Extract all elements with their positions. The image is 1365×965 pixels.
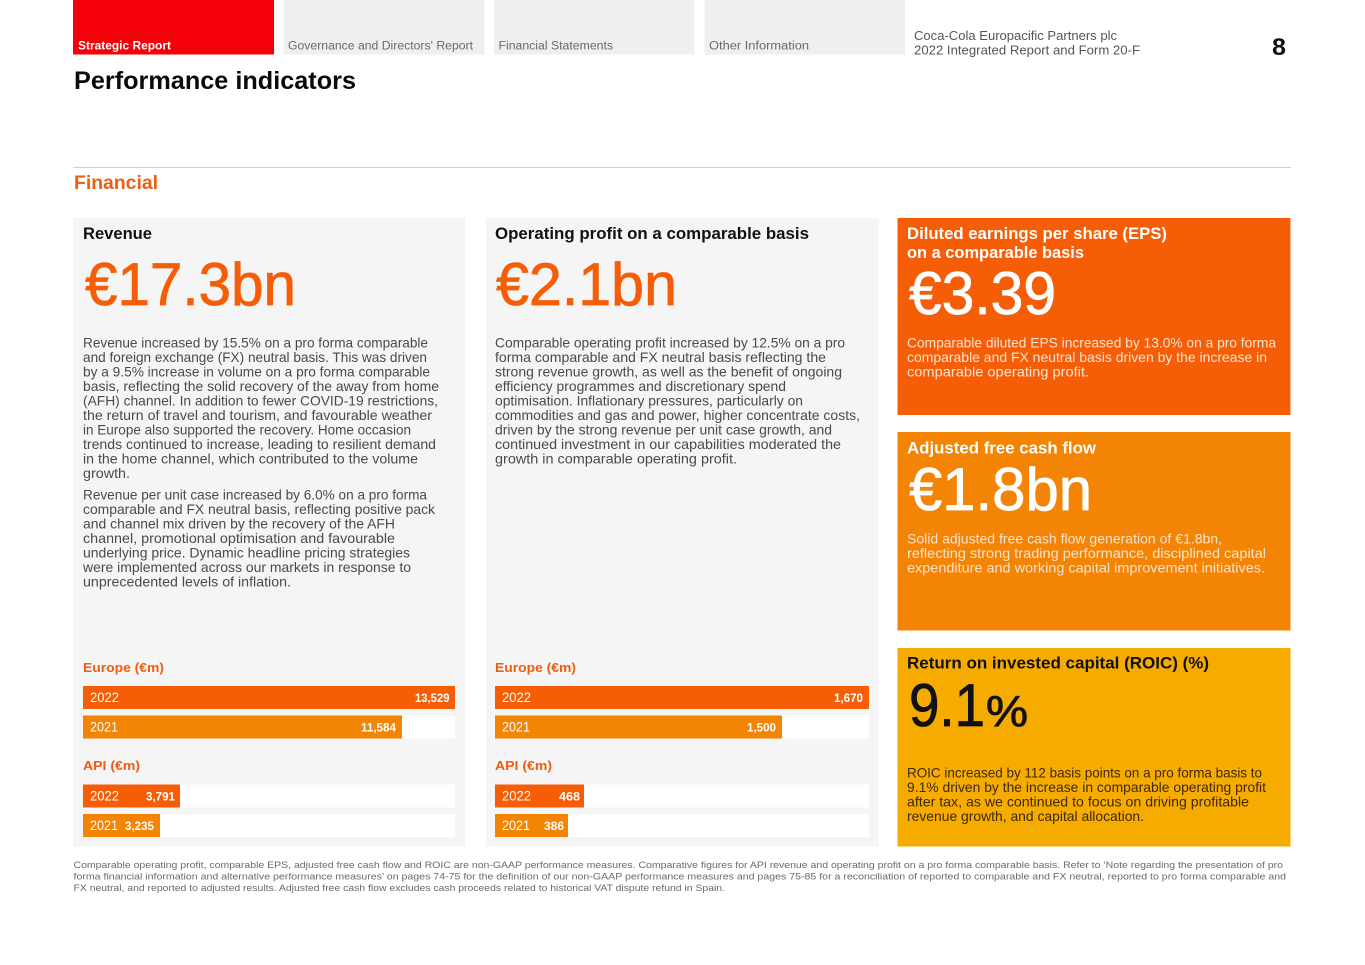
page number: 8 (1272, 34, 1286, 61)
text: revenue commentary: Revenue per unit case increased by 6.0% on a pro forma (83, 488, 427, 502)
tab: Financial Statements: Financial Statements (498, 40, 613, 52)
bar chart: Europe revenue: 13,529 (415, 693, 450, 705)
text: operating profit commentary: optimisation. Inflationary pressures, particularly on (495, 394, 803, 408)
text: revenue commentary: unprecedented levels of inflation. (83, 574, 291, 590)
text: operating profit commentary (495, 336, 860, 466)
heading: Operating profit: Operating profit on a comparable basis (495, 225, 809, 243)
text: EPS commentary: Comparable diluted EPS increased by 13.0% on a pro forma (907, 336, 1276, 350)
text: revenue commentary: trends continued to increase, leading to resilient demand (83, 437, 436, 452)
text: revenue commentary: (AFH) channel. In addition to fewer COVID-19 restrictions, (83, 394, 438, 408)
text: adjusted free cash flow commentary: Solid adjusted free cash flow generation of €1.8bn, (907, 532, 1222, 546)
value: operating profit: €2.1bn (496, 251, 677, 318)
footnote: forma financial information and alternative performance measures’ on pages 74-75 for the definition of our non-GAAP performance measures and pages 75-85 for a reconciliation of reported to comparable and FX neutral, reported to pro forma comparable and (74, 870, 1286, 882)
bar chart: Europe revenue (83, 686, 455, 738)
bar chart: API revenue: 2021 (90, 818, 118, 833)
bar chart: Europe operating profit: 1,670 (834, 693, 863, 705)
bar chart: API revenue: 2022 (90, 788, 119, 804)
text: ROIC commentary: after tax, as we continued to focus on driving profitable (907, 794, 1249, 810)
bar chart: Europe operating profit: 1,500 (747, 722, 776, 734)
text: revenue commentary: were implemented across our markets in response to (82, 560, 411, 575)
text: operating profit commentary: strong revenue growth, as well as the benefit of ongoing (495, 364, 842, 380)
text: operating profit commentary: driven by the strong revenue per unit case growth, and (495, 422, 832, 438)
heading: diluted EPS (907, 225, 1167, 262)
tab: Strategic Report (73, 0, 274, 54)
text: revenue commentary: in Europe also supported the recovery. Home occasion (83, 422, 411, 438)
heading: diluted EPS: on a comparable basis (907, 244, 1084, 262)
report name: Coca-Cola Europacific Partners plc (914, 29, 1117, 43)
section heading: Financial: Financial (74, 173, 158, 194)
panel: ROIC (898, 648, 1290, 846)
text: ROIC commentary: 9.1% driven by the increase in comparable operating profit (907, 780, 1266, 795)
bar chart: API revenue: 3,791 (146, 792, 176, 804)
label: API revenue: API (€m) (83, 758, 140, 773)
bar chart: Europe operating profit (495, 686, 869, 738)
text: revenue commentary: comparable and FX neutral basis, reflecting positive pack (83, 502, 435, 517)
text: EPS commentary: comparable and FX neutral basis driven by the increase in (907, 350, 1267, 365)
text: operating profit commentary: growth in comparable operating profit. (495, 452, 737, 466)
text: revenue commentary: growth. (83, 466, 130, 481)
tab: Financial Statements (494, 0, 694, 54)
text: revenue commentary: underlying price. Dynamic headline pricing strategies (83, 546, 410, 560)
bar chart: Europe operating profit: 2022 (502, 690, 531, 705)
tab: Other Information: Other Information (709, 40, 809, 52)
bar chart: API operating profit: 2021 (502, 818, 530, 833)
footnote: Comparable operating profit, comparable EPS, adjusted free cash flow and ROIC are non-GAAP performance measures. Comparative figures for API revenue and operating profit on a pro forma comparable basis. Refer to ‘Note regarding the presentation of pro (74, 859, 1283, 870)
value: revenue: €17.3bn (85, 251, 296, 318)
text: revenue commentary: by a 9.5% increase in volume on a pro forma comparable (83, 364, 430, 380)
bar chart: Europe revenue: 2022 (90, 690, 119, 705)
value: EPS: €3.39 (909, 260, 1056, 327)
bar chart: API operating profit (495, 784, 869, 837)
report name: 2022 Integrated Report and Form 20-F (914, 44, 1140, 58)
text: adjusted free cash flow commentary: reflecting strong trading performance, disciplined capital (907, 546, 1266, 561)
text: EPS commentary: comparable operating profit. (907, 364, 1089, 380)
value: ROIC: % (986, 687, 1028, 736)
text: operating profit commentary: Comparable operating profit increased by 12.5% on a pro (495, 336, 845, 350)
bar chart: API revenue: 3,235 (125, 821, 155, 833)
text: ROIC commentary: revenue growth, and capital allocation. (907, 809, 1144, 824)
text: operating profit commentary: commodities and gas and power, higher concentrate costs, (495, 408, 860, 423)
text: ROIC commentary (907, 766, 1266, 824)
tab: Governance and Directors' Report: Governance and Directors' Report (288, 40, 474, 52)
panel: diluted EPS (898, 218, 1290, 415)
label: Europe revenue: Europe (€m) (83, 660, 164, 675)
text: operating profit commentary: forma comparable and FX neutral basis reflecting the (495, 350, 826, 365)
value: ROIC: 9.1 (909, 672, 985, 739)
text: revenue commentary: Revenue increased by 15.5% on a pro forma comparable (83, 336, 428, 350)
bar chart: API operating profit: 468 (559, 792, 581, 804)
text: revenue commentary: and channel mix driven by the recovery of the AFH (83, 516, 395, 532)
text: operating profit commentary: efficiency programmes and discretionary spend (495, 379, 786, 394)
navigation tabs (73, 0, 905, 54)
text: adjusted free cash flow commentary (907, 532, 1266, 576)
text: revenue commentary: in the home channel, which contributed to the volume (83, 452, 418, 466)
tab: Strategic Report: Strategic Report (78, 40, 171, 52)
heading: Revenue: Revenue (83, 225, 152, 243)
bar chart: Europe revenue: 11,584 (361, 722, 397, 734)
label: API operating profit: API (€m) (495, 758, 552, 773)
text: revenue commentary: the return of travel and tourism, and favourable weather (83, 408, 432, 423)
bar chart: API operating profit: 2022 (502, 788, 531, 804)
panel: operating profit (486, 218, 878, 846)
text: revenue commentary (82, 336, 439, 590)
bar chart: API operating profit: 386 (544, 821, 564, 833)
text: operating profit commentary: continued investment in our capabilities moderated the (495, 437, 841, 452)
panel: revenue (73, 218, 465, 846)
panel: adjusted free cash flow (898, 432, 1290, 630)
footnote: FX neutral, and reported to adjusted results. Adjusted free cash flow excludes cash proceeds related to historical VAT dispute refund in Spain. (74, 882, 725, 893)
text: EPS commentary (907, 336, 1276, 380)
report name (914, 29, 1140, 58)
text: revenue commentary: basis, reflecting the solid recovery of the away from home (83, 379, 439, 394)
label: Europe operating profit: Europe (€m) (495, 660, 576, 675)
bar chart: Europe revenue: 2021 (90, 720, 118, 734)
bar chart: Europe operating profit: 2021 (502, 720, 530, 734)
footnote (74, 859, 1286, 893)
text: revenue commentary: and foreign exchange (FX) neutral basis. This was driven (83, 350, 427, 365)
tab: Governance and Directors' Report (284, 0, 484, 54)
value: adjusted free cash flow: €1.8bn (909, 456, 1092, 523)
text: revenue commentary: channel, promotional optimisation and favourable (83, 531, 395, 546)
title: Performance indicators (74, 67, 356, 95)
bar chart: API revenue (83, 784, 455, 837)
text: adjusted free cash flow commentary: expenditure and working capital improvement initiatives. (907, 560, 1265, 576)
heading: diluted EPS: Diluted earnings per share (EPS) (907, 225, 1167, 243)
text: ROIC commentary: ROIC increased by 112 basis points on a pro forma basis to (907, 766, 1262, 780)
heading: adjusted free cash flow: Adjusted free cash flow (907, 440, 1096, 458)
heading: ROIC: Return on invested capital (ROIC) (%) (907, 654, 1209, 672)
tab: Other Information (704, 0, 905, 54)
